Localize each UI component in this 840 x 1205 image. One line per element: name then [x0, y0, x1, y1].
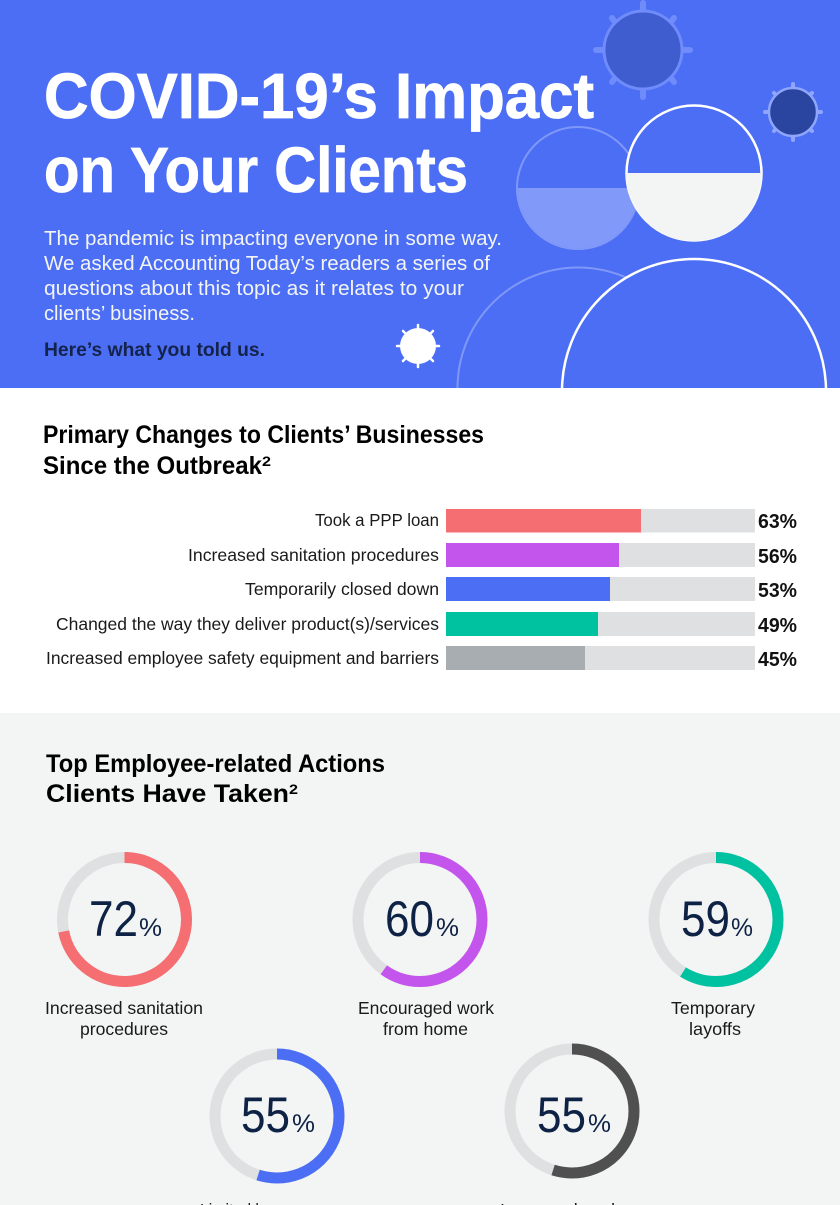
panel: header	[0, 0, 840, 388]
title: COVID-19’s Impact	[44, 60, 594, 132]
panel: employee actions	[0, 713, 840, 1205]
icon: small virus	[765, 84, 821, 140]
bar: sanitation: 56%	[758, 546, 797, 568]
intro text: clients’ business.	[44, 303, 195, 325]
donut: 55% dark: 55	[537, 1087, 586, 1143]
intro text	[44, 228, 502, 325]
donut: 72%: procedures	[80, 1019, 168, 1039]
donut: 72%	[45, 858, 203, 1039]
bar: delivery: 49%	[758, 615, 797, 637]
heading: primary changes	[43, 421, 484, 480]
donut: 59%: %	[731, 914, 753, 942]
intro text: questions about this topic as it relates to your	[44, 278, 464, 300]
icon: faint large circle	[458, 268, 698, 508]
bar: delivery	[56, 612, 797, 637]
bar chart	[46, 509, 797, 671]
icon: white half-filled circle	[626, 106, 762, 241]
donut: 55% blue	[200, 1054, 339, 1205]
donut: 55% blue: %	[292, 1110, 315, 1138]
heading: primary changes: Primary Changes to Clients’ Businesses	[43, 421, 484, 449]
icon: white large circle	[562, 259, 826, 523]
donut: 72%: %	[139, 914, 162, 942]
bar: safety equipment	[46, 646, 797, 671]
donut: 59%: Temporary	[671, 998, 755, 1018]
icon: large virus	[596, 3, 690, 97]
heading: primary changes: 2	[262, 453, 271, 469]
bar: delivery: Changed the way they deliver product(s)/services	[56, 614, 439, 634]
donut: 59%: 59	[681, 891, 730, 947]
donut: 60%	[358, 858, 494, 1039]
donut: 55% dark	[500, 1049, 634, 1205]
bar: closed down: 53%	[758, 580, 797, 602]
donut: 55% blue: 55	[241, 1087, 290, 1143]
title	[44, 60, 594, 206]
title: on Your Clients	[44, 134, 468, 206]
icon: faint half-filled circle	[516, 127, 640, 250]
tagline: Here’s what you told us.	[44, 340, 265, 361]
heading: primary changes: Since the Outbreak	[43, 452, 262, 480]
donut: 60%: from home	[383, 1019, 468, 1039]
icon: white virus	[397, 325, 439, 367]
intro text: We asked Accounting Today’s readers a series of	[44, 253, 490, 275]
panel: primary changes	[43, 421, 797, 671]
donut: 59%: layoffs	[689, 1019, 741, 1039]
bar: closed down	[245, 577, 797, 602]
bar: PPP loan: Took a PPP loan	[315, 510, 439, 530]
heading: employee actions	[46, 750, 385, 808]
donut: 72%: Increased sanitation	[45, 998, 203, 1018]
heading: employee actions: Top Employee-related Actions	[46, 750, 385, 778]
bar: sanitation	[188, 543, 797, 568]
heading: employee actions: Clients Have Taken	[46, 780, 289, 808]
bar: safety equipment: 45%	[758, 649, 797, 671]
heading: employee actions: 2	[289, 781, 298, 797]
bar: PPP loan: 63%	[758, 511, 797, 533]
donut: 60%: %	[436, 914, 459, 942]
donut: 60%: Encouraged work	[358, 998, 494, 1018]
donut: 60%: 60	[385, 891, 434, 947]
intro text: The pandemic is impacting everyone in some way.	[44, 228, 502, 250]
bar: PPP loan	[315, 509, 797, 533]
bar: safety equipment: Increased employee safety equipment and barriers	[46, 648, 439, 668]
donut: 72%: 72	[89, 891, 138, 947]
bar: closed down: Temporarily closed down	[245, 579, 439, 599]
donut: 55% dark: %	[588, 1110, 611, 1138]
bar: sanitation: Increased sanitation procedures	[188, 545, 439, 565]
donut: 59%	[654, 858, 778, 1039]
